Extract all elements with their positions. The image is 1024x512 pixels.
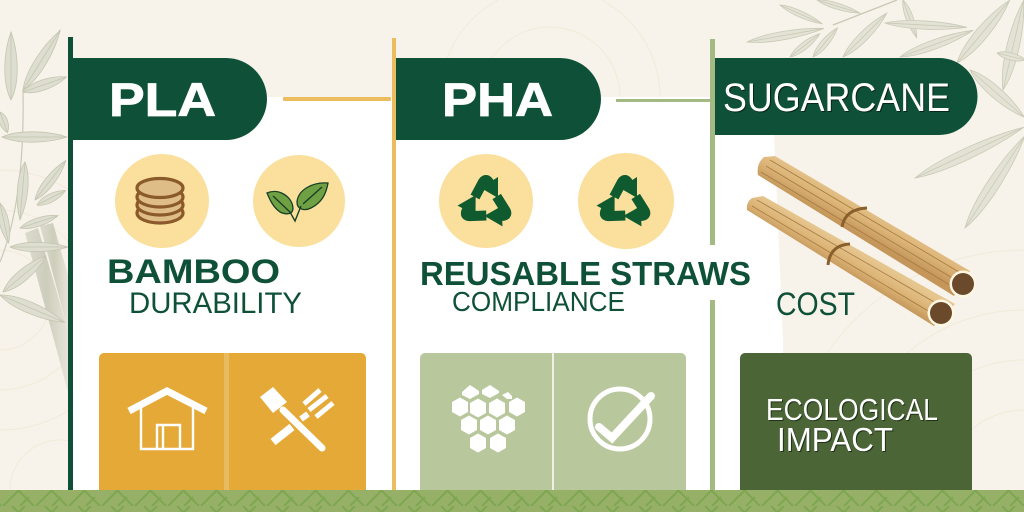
white content panel <box>73 97 783 490</box>
icon: leaves <box>253 155 345 247</box>
faded bamboo tubes <box>25 223 68 392</box>
bottom woven band <box>0 490 1024 512</box>
heading: PLA: PLA <box>109 73 216 126</box>
straw, upper <box>758 156 976 298</box>
icon: recycling, first <box>439 154 533 248</box>
column: Sugarcane <box>710 39 978 490</box>
label: REUSABLE STRAWS: REUSABLE STRAWS <box>420 255 751 292</box>
icon: house <box>129 391 206 449</box>
label: COST: COST <box>776 286 855 322</box>
column: PHA <box>392 38 751 490</box>
straw, lower <box>747 196 955 326</box>
heading: Sugarcane <box>715 58 978 135</box>
label: DURABILITY: DURABILITY <box>129 287 302 320</box>
connector: PLA to PHA <box>283 97 391 101</box>
illustration: bamboo straws <box>747 156 976 326</box>
column rule: PLA <box>68 37 73 490</box>
label: BAMBOO: BAMBOO <box>107 253 280 291</box>
card: ecological impact <box>740 353 972 490</box>
heading: PLA <box>73 58 267 140</box>
heading: PHA <box>396 58 601 140</box>
decorative bamboo leaves, left <box>0 28 69 392</box>
icon: crossed tools <box>260 387 333 448</box>
card: ecological impact: IMPACT <box>777 421 893 458</box>
icon: recycling, second <box>578 153 674 249</box>
column rule: Sugarcane lower <box>710 300 715 490</box>
card: sage icons <box>420 353 686 490</box>
heading: Sugarcane: SUGARCANE <box>723 76 950 120</box>
column: PLA <box>68 37 391 490</box>
icon: stacked discs <box>115 154 209 248</box>
column rule: Sugarcane upper <box>710 39 715 245</box>
connector: PHA to Sugarcane <box>616 99 711 102</box>
column rule: PHA <box>392 38 396 490</box>
card: orange icons <box>99 353 366 490</box>
card: ecological impact: ECOLOGICAL <box>766 392 938 427</box>
icon: check mark in ring <box>590 389 651 449</box>
label: COMPLIANCE: COMPLIANCE <box>452 286 625 317</box>
decorative bamboo leaves, top right <box>746 0 1024 231</box>
icon: honeycomb <box>452 385 525 452</box>
heading: PHA: PHA <box>442 73 553 126</box>
